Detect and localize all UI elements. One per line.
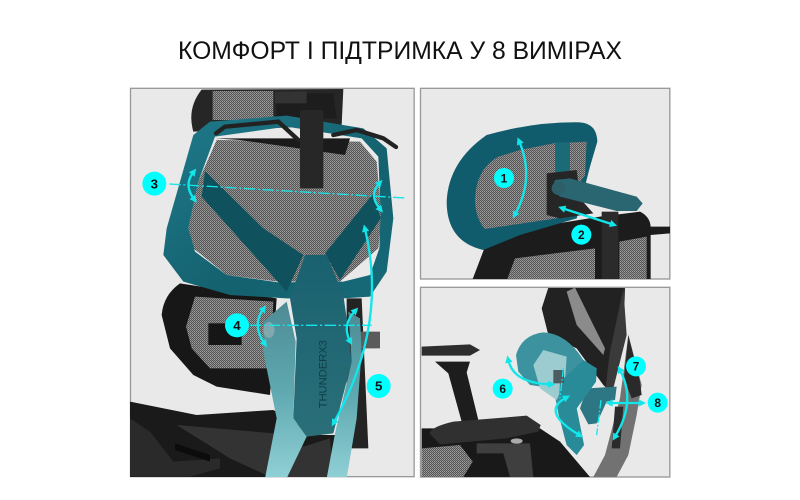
badge 1: 1 <box>501 171 508 185</box>
badge 2 <box>571 225 591 245</box>
title: КОМФОРТ І ПІДТРИМКА У 8 ВИМІРАХ <box>178 38 622 65</box>
axis dashes <box>560 368 601 435</box>
mount <box>547 170 593 218</box>
backrest side <box>542 288 627 392</box>
light teal arms <box>263 302 362 478</box>
spine <box>290 255 352 437</box>
badge 4: 4 <box>233 318 241 333</box>
arrow: height 7 <box>615 370 627 437</box>
arrow: rotation 4 left <box>258 309 264 343</box>
chair photo: headrest <box>447 122 670 279</box>
near armrest <box>429 416 541 477</box>
teal headrest mount <box>580 387 623 448</box>
axis line 3 <box>169 184 405 198</box>
arrow: rotation 3 left <box>188 172 194 199</box>
arrow: rotation 6 <box>508 360 551 384</box>
badge 6 <box>493 379 513 399</box>
badge 7 <box>626 356 646 376</box>
arrow: rotation 4 right <box>347 311 355 341</box>
lumbar support <box>162 283 277 395</box>
chair photo: back view <box>130 89 396 478</box>
badge 1 <box>494 168 514 188</box>
headrest <box>447 122 597 250</box>
panel: headrest adjustment <box>420 88 670 279</box>
chair photo: side view <box>422 288 642 477</box>
seat <box>422 428 590 477</box>
badge 8: 8 <box>654 396 661 410</box>
brand logo: THUNDERX3 <box>318 340 330 408</box>
chair back <box>473 212 670 279</box>
headrest post <box>275 92 323 188</box>
seat <box>130 402 337 478</box>
rear frame <box>593 335 642 477</box>
axis line 4 <box>250 324 372 326</box>
badge 5: 5 <box>375 379 383 394</box>
badge 3: 3 <box>151 176 158 191</box>
headrest neck <box>555 142 570 172</box>
badge 6: 6 <box>499 382 506 396</box>
badge 4 <box>225 313 249 337</box>
arrow: pivot <box>556 398 579 435</box>
teal back frame <box>163 116 393 298</box>
headrest arm <box>552 178 643 211</box>
arrow: depth 8 <box>610 399 641 406</box>
Y straps <box>202 171 381 292</box>
badge 5 <box>367 374 391 398</box>
arrow: rotation 3 right <box>374 183 380 209</box>
arrow: tilt 5 <box>334 229 372 422</box>
panel: side view <box>420 287 670 477</box>
arrow: depth 2 <box>563 208 613 224</box>
badge 7: 7 <box>633 360 640 374</box>
frame mesh <box>188 140 382 282</box>
teal headrest <box>516 332 597 455</box>
badge 3 <box>142 172 166 196</box>
right side mechanism <box>347 298 380 448</box>
arrow: tilt 1 <box>515 142 526 214</box>
upper backrest behind frame <box>191 89 343 132</box>
badge 2: 2 <box>578 228 585 242</box>
frame handles <box>216 122 396 147</box>
far armrest <box>422 344 480 422</box>
badge 8 <box>648 393 668 413</box>
panel: back view <box>130 88 414 478</box>
